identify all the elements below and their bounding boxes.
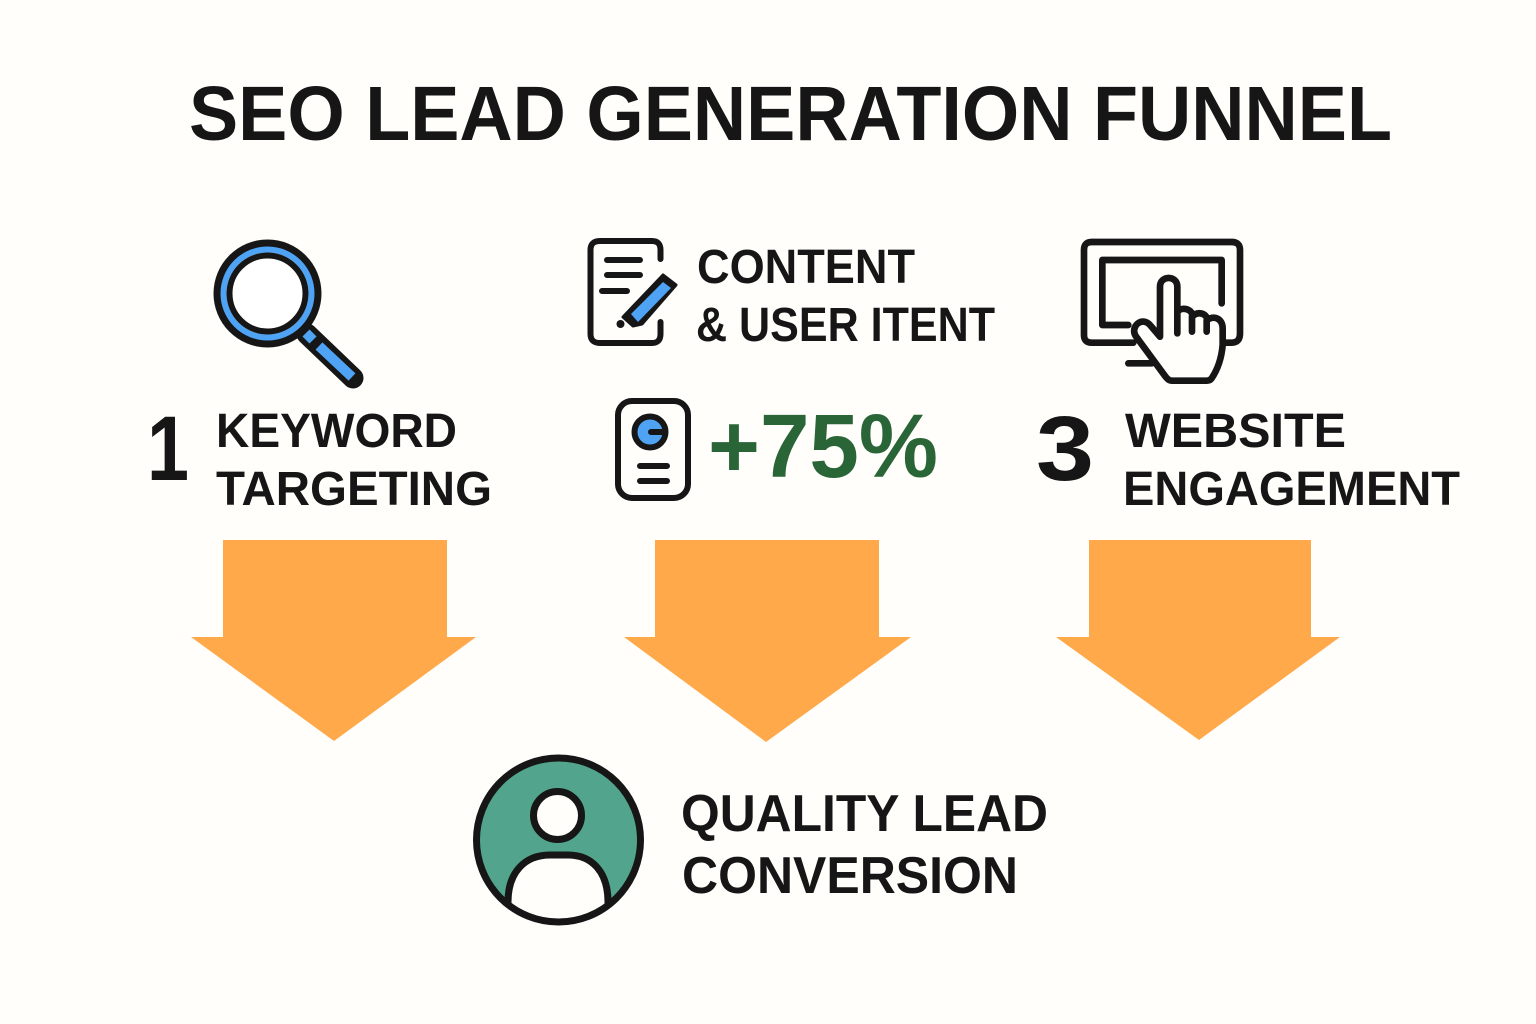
step 3 label: ENGAGEMENT — [1123, 463, 1460, 516]
icon: magnifying glass — [214, 240, 353, 378]
step 2 label: CONTENT — [697, 241, 915, 294]
step 1 label: KEYWORD — [216, 405, 457, 458]
step 2 label — [696, 241, 995, 352]
step 1 number: 1 — [147, 398, 189, 500]
outcome label — [681, 785, 1048, 905]
step 2 label: & USER ITENT — [696, 299, 995, 352]
arrow: step 2 down — [624, 540, 911, 742]
arrow: step 1 down — [191, 540, 476, 741]
outcome label: CONVERSION — [682, 847, 1018, 905]
step 1 label: TARGETING — [216, 463, 492, 516]
step 3 label — [1123, 405, 1460, 516]
statistic: +75%: +75% — [708, 397, 938, 497]
icon: lead avatar — [476, 758, 640, 930]
icon: document with pencil — [590, 241, 676, 343]
step 1 label — [216, 405, 492, 516]
title: SEO LEAD GENERATION FUNNEL — [189, 71, 1392, 157]
arrow: step 3 down — [1056, 540, 1340, 740]
step 3 label: WEBSITE — [1125, 405, 1346, 458]
icon: profile card — [618, 401, 688, 498]
step 3 number: 3 — [1036, 398, 1094, 500]
outcome label: QUALITY LEAD — [681, 785, 1048, 843]
icon: hand touching screen — [1084, 242, 1240, 381]
